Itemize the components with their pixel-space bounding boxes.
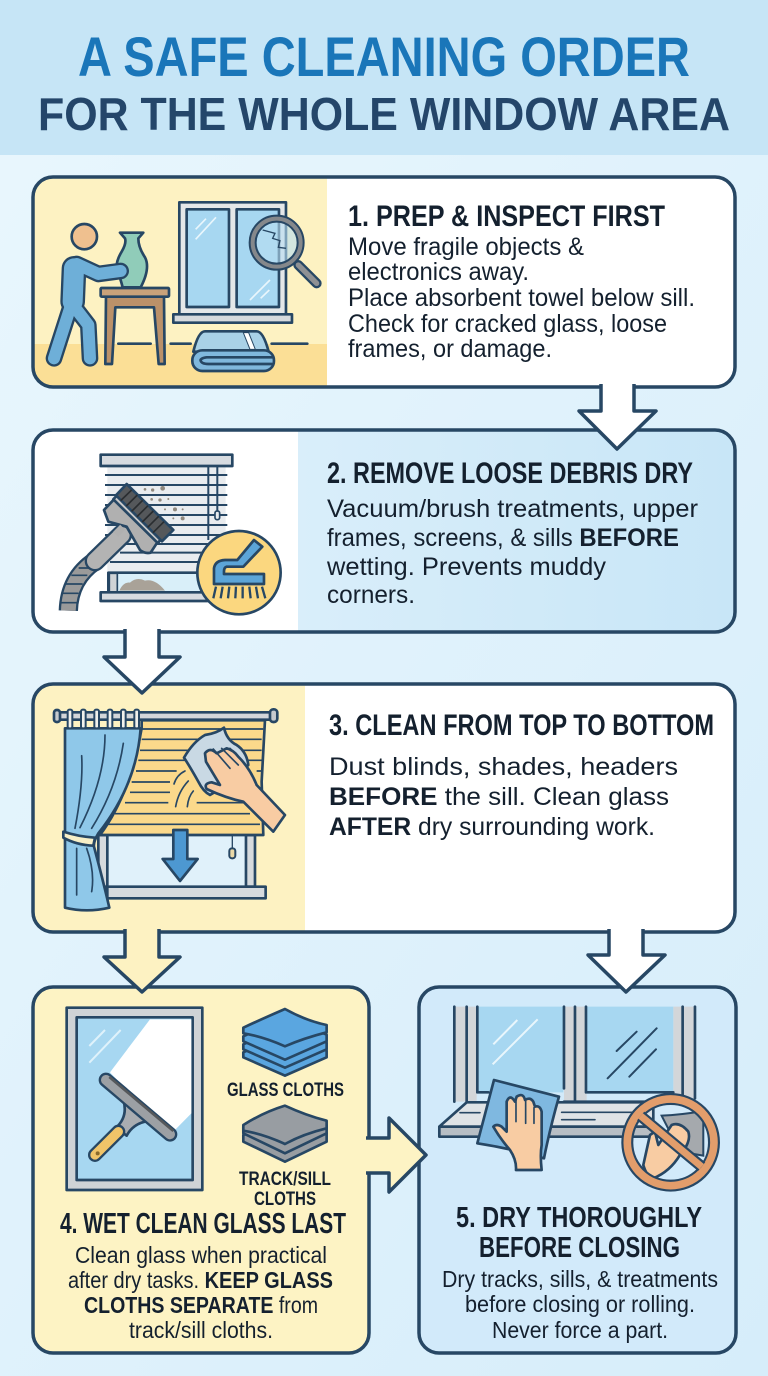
panel: step 4 wet clean glass last (33, 987, 369, 1353)
panel: step 1 prep and inspect (33, 177, 735, 387)
step 5 text: Never force a part. (492, 1317, 668, 1343)
step 1 text: Move fragile objects & (348, 233, 584, 261)
arrow: step 4 to step 5 (366, 1118, 426, 1192)
step 4 text: 4. WET CLEAN GLASS LAST (60, 1208, 346, 1240)
arrow: step 3 to step 4 (104, 929, 180, 992)
step 1 text: frames, or damage. (348, 335, 552, 363)
step 5 text: before closing or rolling. (465, 1291, 695, 1317)
step 1 text: Check for cracked glass, loose (348, 310, 667, 338)
step 3 text: Dust blinds, shades, headers (329, 753, 678, 781)
step 3 text: BEFORE the sill. Clean glass (329, 783, 669, 811)
step 3 text: AFTER dry surrounding work. (329, 813, 655, 841)
step 5 text: Dry tracks, sills, & treatments (442, 1266, 718, 1292)
step 2 text: wetting. Prevents muddy (326, 553, 607, 581)
step 1 text: electronics away. (348, 258, 529, 286)
title: FOR THE WHOLE WINDOW AREA (38, 88, 730, 140)
step 5 text: BEFORE CLOSING (479, 1232, 680, 1264)
arrow: step 3 to step 5 (588, 929, 665, 992)
step 1 text: Place absorbent towel below sill. (348, 284, 695, 312)
label: track and sill cloths (239, 1169, 331, 1210)
step 4 text (60, 1208, 346, 1343)
step 2 text: Vacuum/brush treatments, upper (327, 495, 698, 523)
panel: step 3 clean from top to bottom (33, 684, 735, 932)
step 4 text: after dry tasks. KEEP GLASS (68, 1267, 333, 1293)
arrow: step 2 to step 3 (104, 629, 180, 693)
illustration: vacuum brush on dusty blinds (60, 455, 281, 614)
step 2 text: frames, screens, & sills BEFORE (327, 524, 679, 552)
step 2 text: corners. (327, 581, 415, 609)
step 5 text: 5. DRY THOROUGHLY (456, 1202, 702, 1234)
illustration: hand drying sill with no-force symbol (439, 1007, 714, 1186)
label: glass cloths: GLASS CLOTHS (227, 1080, 344, 1101)
label: track and sill cloths: TRACK/SILL (239, 1169, 331, 1190)
step 4 text: CLOTHS SEPARATE from (84, 1292, 318, 1318)
title (0, 0, 768, 155)
step 4 text: track/sill cloths. (129, 1317, 273, 1343)
illustration: hand dusting blinds behind curtain (54, 709, 285, 910)
step 3 text (329, 709, 714, 841)
illustration: squeegee on window and cloth stacks (67, 1008, 327, 1190)
panel: step 5 dry thoroughly (419, 987, 736, 1353)
illustration: person moving vase, window with magnifier, towel (54, 202, 317, 371)
step 5 text (442, 1202, 718, 1343)
arrow: step 1 to step 2 (579, 384, 656, 449)
panel: step 2 remove loose debris (33, 430, 735, 632)
step 1 text (348, 200, 695, 363)
step 1 text: 1. PREP & INSPECT FIRST (348, 200, 665, 233)
label: track and sill cloths: CLOTHS (254, 1189, 316, 1210)
step 2 text (326, 457, 698, 609)
step 4 text: Clean glass when practical (75, 1242, 327, 1268)
